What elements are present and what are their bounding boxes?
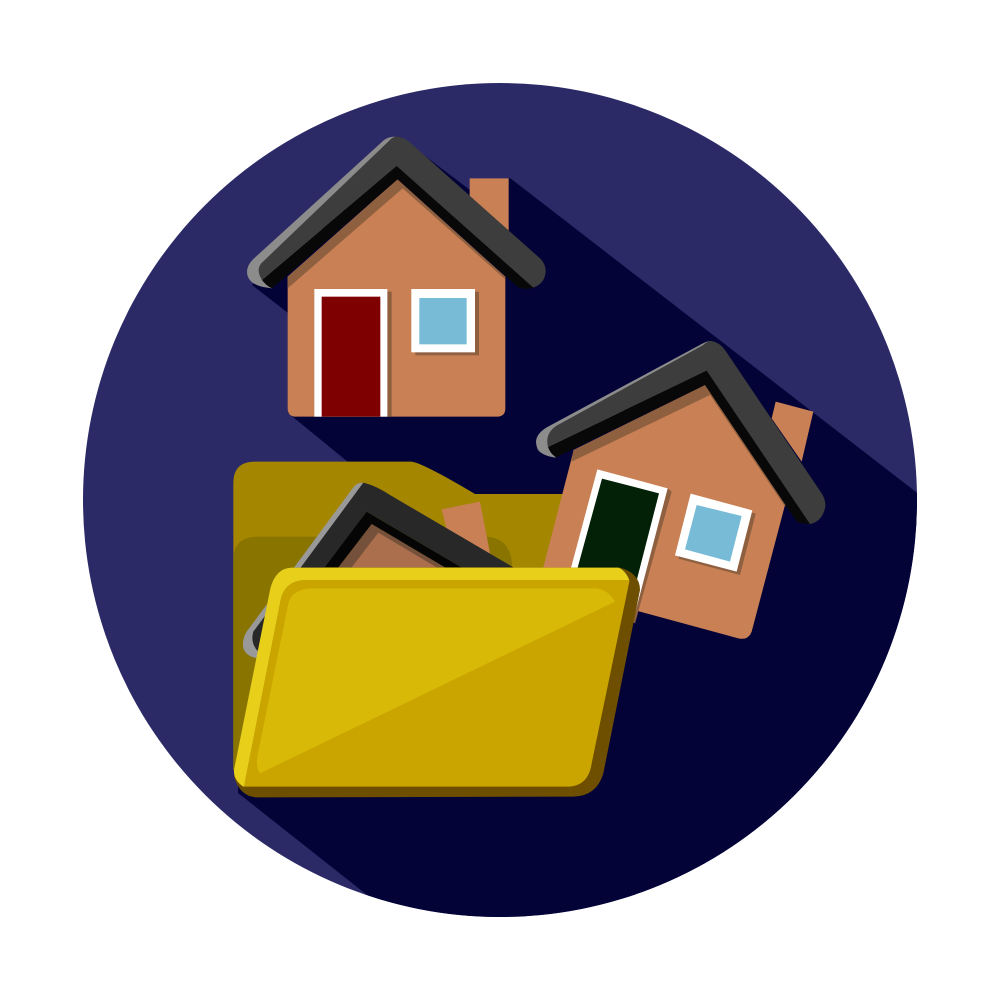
chimney — [442, 502, 491, 557]
house: right tilted — [536, 341, 825, 639]
icon: houses in a folder — [83, 83, 917, 917]
house body — [288, 180, 505, 417]
body — [338, 524, 445, 567]
roof shade — [572, 385, 787, 507]
folder back — [233, 462, 567, 770]
window — [675, 494, 756, 575]
roof — [536, 341, 825, 524]
roof shade — [288, 179, 505, 288]
body — [540, 385, 785, 639]
chimney — [772, 402, 813, 462]
house: inside folder — [243, 483, 513, 658]
chimney — [470, 178, 509, 233]
roof — [243, 483, 513, 658]
roof — [247, 137, 546, 289]
house: top — [247, 137, 546, 417]
folder light edge — [234, 568, 629, 787]
folder edge shadow — [234, 568, 640, 797]
background circle — [83, 83, 917, 917]
door — [563, 469, 672, 623]
folder front — [234, 568, 640, 797]
folder gloss — [257, 588, 615, 773]
door shadow — [387, 292, 392, 417]
long shadow — [238, 137, 917, 917]
window — [411, 289, 479, 355]
folder face — [244, 580, 629, 787]
door — [314, 289, 387, 417]
